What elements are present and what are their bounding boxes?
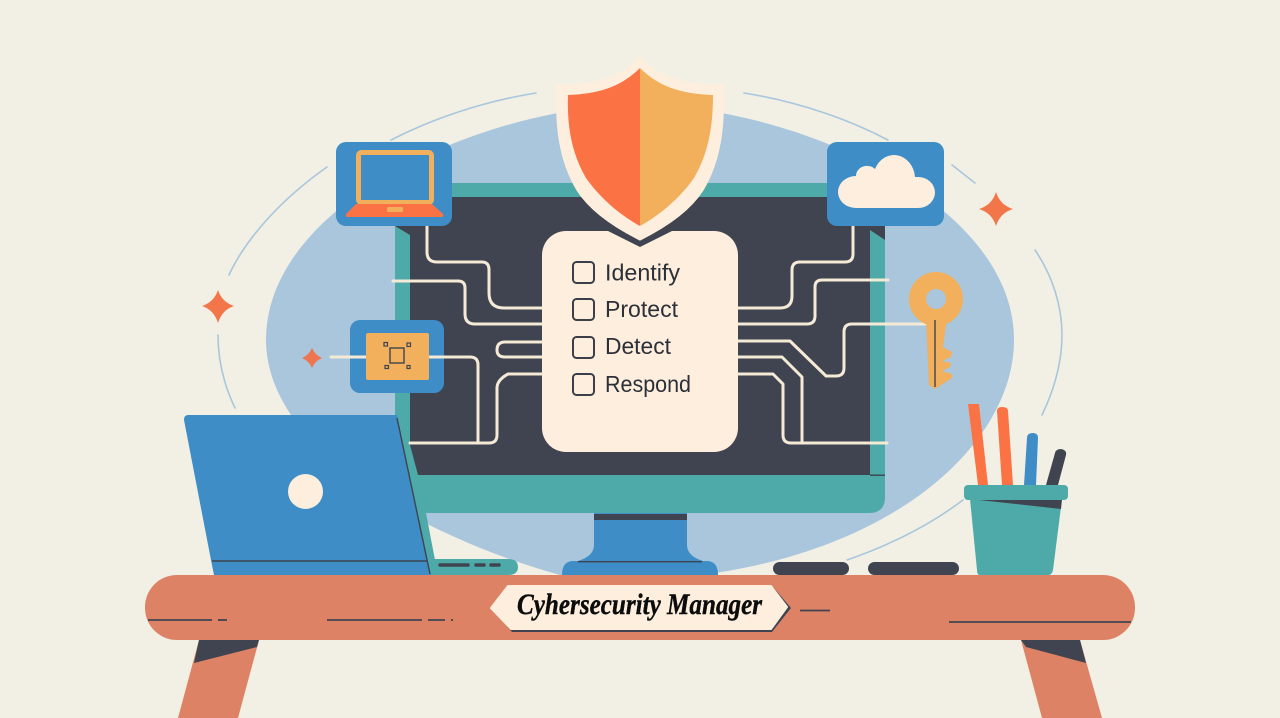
item: Identify: Identify [605,260,681,286]
item: Protect [573,296,679,322]
icon: key [918,280,954,389]
item: Respond: Respond [605,371,691,397]
checklist card [542,231,738,452]
item: Respond [573,371,691,397]
desk top [145,575,1135,640]
laptop logo dot [288,474,323,509]
item: Identify [573,260,681,286]
star left small [302,348,322,368]
star right [979,192,1013,226]
monitor [393,183,926,575]
monitor bezel [395,183,885,513]
title plaque [491,586,791,632]
big laptop [184,415,518,575]
desk legs [178,640,259,718]
icon: shield [558,58,722,247]
icon tile: cloud [827,142,944,226]
title plaque: Cyhersecurity Manager [517,588,762,621]
circuit lines [393,226,926,443]
desk [145,575,1135,718]
star left large [202,290,234,323]
item: Detect: Detect [605,333,672,359]
item: Protect: Protect [605,296,679,322]
item: Detect [573,333,672,359]
laptop lid [184,415,431,575]
monitor stand [562,513,718,575]
laptop base [420,559,518,575]
icon tile: laptop [336,142,452,226]
monitor screen [395,197,885,475]
pen cup [964,404,1068,575]
icon tile: chip [331,320,444,393]
orbit arcs [218,93,1062,560]
keyboard pills [773,562,959,575]
background blue blob [266,105,1014,575]
